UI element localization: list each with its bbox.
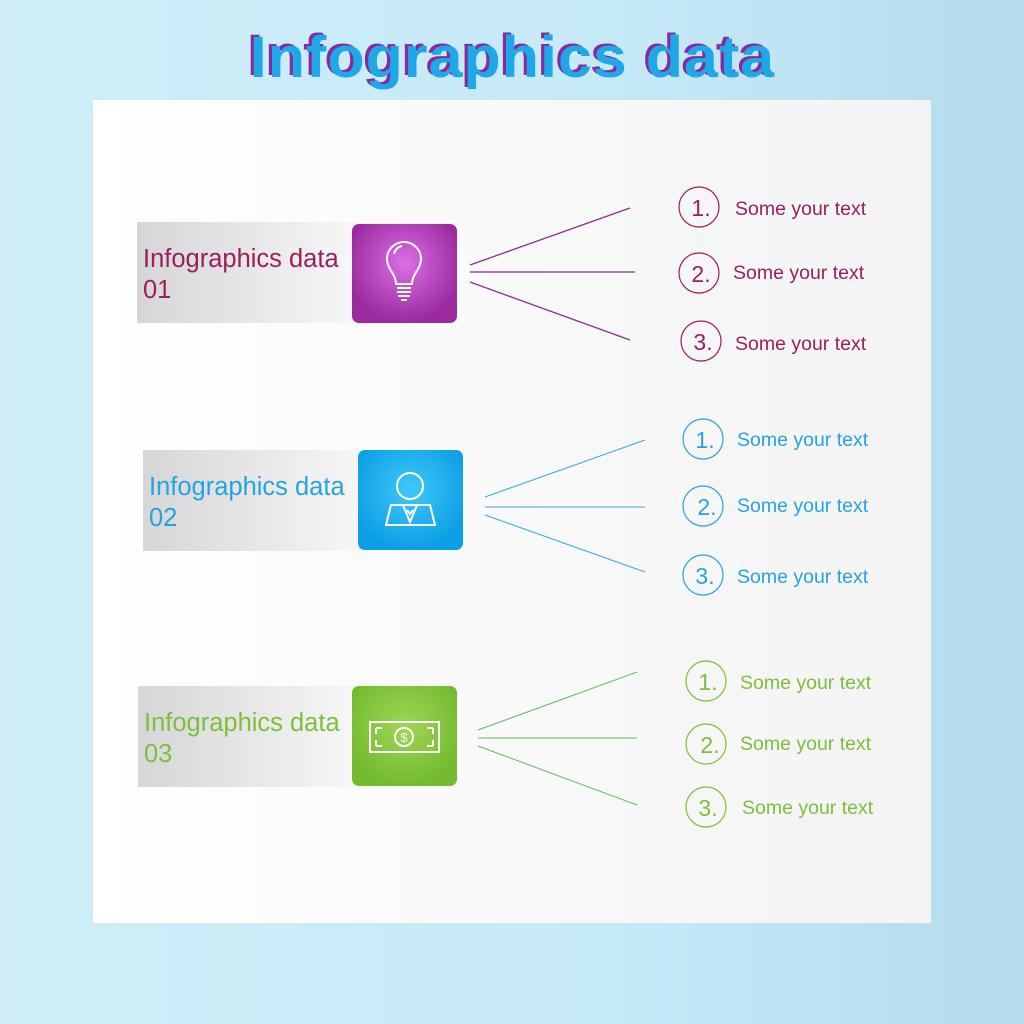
connector lines and list items: Some your text: [735, 333, 867, 355]
panel: main: [93, 100, 931, 923]
icon: money: $: [400, 730, 408, 745]
icon: money: [352, 686, 457, 786]
list 01: [679, 187, 721, 361]
connector lines and list items: 2.: [697, 494, 717, 520]
label box 01: Infographics data: [143, 245, 339, 273]
list 02: [683, 419, 723, 595]
connector lines and list items: 1.: [691, 195, 711, 221]
label box 02: 02: [149, 504, 177, 532]
label box 01: 01: [143, 276, 171, 304]
label box 03: 03: [144, 740, 172, 768]
title: Infographics data: [250, 25, 775, 90]
connector lines and list items: Some your text: [733, 262, 865, 284]
label box 01: [137, 222, 357, 323]
lines 01: [470, 208, 635, 340]
connector lines and list items: 2.: [700, 732, 720, 758]
connector lines and list items: Some your text: [740, 672, 872, 694]
connector lines and list items: Some your text: [740, 733, 872, 755]
connector lines and list items: Some your text: [737, 429, 869, 451]
connector lines and list items: 1.: [698, 669, 718, 695]
connector lines and list items: 3.: [693, 329, 713, 355]
lines 03: [478, 672, 637, 805]
connector lines and list items: Some your text: [742, 797, 874, 819]
icon: person: [358, 450, 463, 550]
connector lines and list items: 3.: [698, 795, 718, 821]
label box 03: [138, 686, 358, 787]
label box 02: Infographics data: [149, 473, 345, 501]
label box 02: [143, 450, 363, 551]
icon: light bulb: [352, 224, 457, 323]
connector lines and list items: Some your text: [737, 566, 869, 588]
lines 02: [485, 440, 645, 572]
connector lines and list items: 3.: [695, 563, 715, 589]
connector lines and list items: 1.: [695, 427, 715, 453]
connector lines and list items: Some your text: [735, 198, 867, 220]
list 03: [686, 661, 726, 827]
label box 03: Infographics data: [144, 709, 340, 737]
connector lines and list items: 2.: [691, 261, 711, 287]
connector lines and list items: Some your text: [737, 495, 869, 517]
